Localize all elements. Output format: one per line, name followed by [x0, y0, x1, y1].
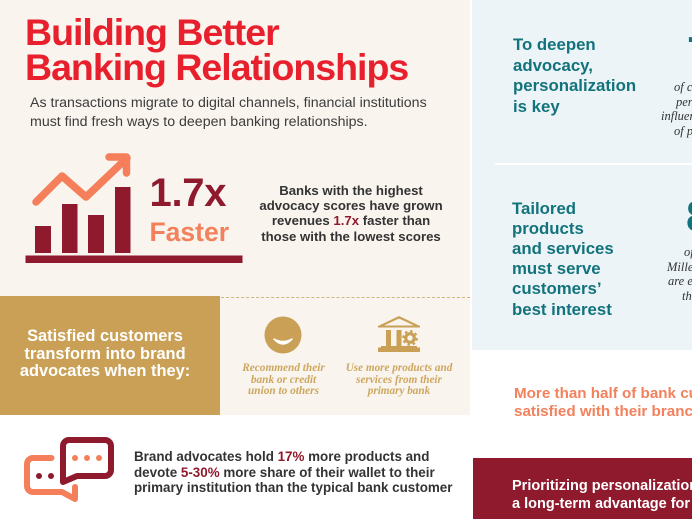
text: advocacy scores: Banks with the highest [279, 183, 423, 198]
text: advocacy scores [259, 183, 443, 244]
intro text: must find fresh ways to deepen banking relationships. [30, 114, 368, 130]
text: advocacy scores: advocacy scores have grown [259, 198, 443, 213]
stat label: Faster: Faster [150, 217, 229, 247]
heading: tailored products: customers’ [512, 279, 602, 298]
text: recommend: Recommend their [242, 362, 325, 374]
caption: second stat, clipped [666, 245, 692, 303]
heading: to deepen advocacy: personalization [513, 76, 636, 95]
heading: tailored products: must serve [512, 259, 601, 278]
title: Building Better [25, 11, 279, 53]
heading: tailored products: best interest [512, 300, 612, 319]
heading: tailored products: and services [512, 239, 614, 258]
title [25, 11, 408, 88]
text: advocacy scores: those with the lowest scores [261, 229, 441, 244]
text: more than half [514, 385, 692, 420]
text: recommend: union to others [248, 385, 319, 397]
text: brand advocates: Brand advocates hold 17% more products and [134, 449, 429, 464]
text: use more products: services from their [356, 374, 442, 386]
intro text: As transactions migrate to digital channels, financial institutions [30, 95, 427, 111]
text: brand advocates [134, 449, 452, 495]
heading: tailored products: products [512, 219, 584, 238]
intro text [30, 95, 427, 130]
icon: smiley [264, 316, 302, 354]
caption: first stat, clipped: of c [674, 80, 692, 94]
text: satisfied customers: Satisfied customers [27, 327, 183, 345]
heading: to deepen advocacy [513, 35, 636, 116]
text: recommend [242, 362, 325, 397]
text: advocacy scores: revenues 1.7x faster than [272, 213, 430, 228]
heading: tailored products: Tailored [512, 198, 576, 218]
panel: prioritizing personalization [473, 458, 692, 519]
divider between rows [495, 163, 692, 164]
text: brand advocates: primary institution than the typical bank customer [134, 480, 452, 495]
text: satisfied customers [20, 327, 190, 380]
text: prioritizing personalization: a long-term advantage for [512, 496, 690, 512]
stat: 1.7x: 1.7x [150, 171, 226, 215]
title: Banking Relationships [25, 46, 408, 88]
panel: intro background [0, 0, 470, 415]
text: use more products: Use more products and [346, 362, 452, 374]
caption: second stat, clipped: th [682, 289, 692, 303]
text: satisfied customers: transform into brand [24, 344, 186, 362]
panel: personalization background [472, 0, 692, 350]
text: recommend: bank or credit [251, 374, 316, 386]
icon: growth bar chart with arrow [26, 153, 242, 263]
dashed divider [221, 297, 470, 298]
heading: to deepen advocacy: To deepen [513, 35, 596, 54]
panel: satisfied customers [0, 296, 220, 415]
text: satisfied customers: advocates when they: [20, 362, 190, 380]
icon: chat bubbles [24, 437, 114, 502]
heading: to deepen advocacy: is key [513, 96, 560, 116]
text: prioritizing personalization [512, 478, 692, 512]
text: brand advocates: devote 5-30% more share of their wallet to their [134, 464, 435, 480]
text: use more products: primary bank [368, 385, 430, 397]
heading: to deepen advocacy: advocacy, [513, 56, 593, 74]
heading: tailored products [512, 198, 614, 319]
text: use more products [346, 362, 452, 397]
caption: first stat, clipped [661, 80, 692, 138]
icon: bank with gear [378, 316, 420, 352]
